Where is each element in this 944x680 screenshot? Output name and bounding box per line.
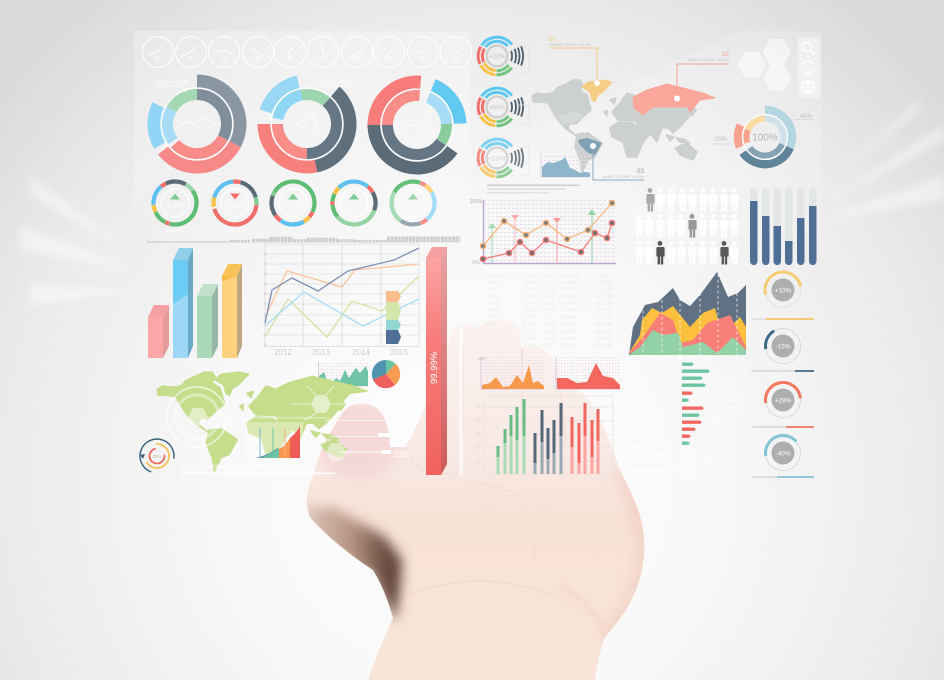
hand [300, 320, 644, 680]
gauge -15% [751, 326, 814, 371]
horizontal bar list: $71.16 [713, 391, 730, 397]
stock ring 2 [209, 177, 261, 233]
faint data table: -0.10 [541, 301, 554, 307]
100% donut chart: 20% [715, 137, 728, 143]
faint data table: +0.53% [559, 322, 578, 328]
volume histogram strip [147, 239, 460, 242]
year labels: 2012 [274, 348, 292, 357]
callout 02 [674, 51, 730, 102]
100% donut chart: 100% [752, 132, 778, 144]
donut 2 callout: S5TO +28.3% [320, 80, 355, 86]
white glass strip [460, 327, 463, 475]
faint data table: +0.37 [541, 280, 555, 286]
orange mini area chart: 100% [477, 357, 486, 361]
small blue area chart [541, 153, 590, 177]
world clocks row: BI [288, 56, 292, 62]
radial gauge +60% [463, 73, 531, 141]
faint data table: 18.50M [594, 322, 613, 328]
horizontal bar list: 130.00 [682, 473, 699, 479]
gauge +28%: +28% [775, 398, 792, 404]
faint data table: 7.45 [523, 294, 534, 300]
faint data table: MXM [487, 329, 500, 335]
stock ring 1 [145, 173, 205, 233]
grouped thin bar chart: 30 [475, 432, 481, 438]
radial gauge +120%: +120% [488, 156, 507, 162]
faint data table: 3.78 [523, 315, 534, 321]
world clocks row: SE [453, 56, 460, 62]
faint data table: -1.29% [559, 329, 577, 335]
faint data table: NBL [487, 322, 498, 328]
yellow bar [222, 264, 242, 358]
faint data table: +0.02 [541, 343, 555, 349]
horizontal bar list: 36.15 - 46.26 B [682, 453, 720, 459]
callout 03: MARKET SHARE +40.5% [602, 175, 645, 179]
faint data table: 25.42M [594, 308, 613, 314]
faint data table: -0.04% [559, 315, 577, 321]
99.99% red 3D bar [426, 247, 447, 475]
world clocks row: SH [420, 56, 427, 62]
marker flags [488, 209, 596, 263]
horizontal bar list: 32,734,197 [713, 413, 741, 419]
world clocks row: CH [187, 56, 195, 62]
year labels [274, 348, 408, 357]
faint data table: STST [487, 315, 502, 321]
faint data table: 224.70 [523, 301, 540, 307]
100% donut chart: 45% [800, 114, 813, 120]
99.99% red 3D bar: 99.99% [429, 351, 440, 384]
faint data table: +0.19% [559, 343, 578, 349]
callout 02: MARKET SHARE +20.0% [687, 58, 730, 62]
donut 1 callout [154, 80, 189, 92]
green world map [157, 372, 367, 472]
faint data table: 18.69M [594, 329, 613, 335]
map land masses [532, 80, 697, 173]
circular arrows gauge: 25% [152, 454, 162, 459]
faint data table: 23.64 [523, 287, 537, 293]
callout 01 [549, 36, 600, 86]
pie chart [372, 360, 400, 388]
faint data table: TEM [487, 308, 499, 314]
gauge -40%: -40% [775, 450, 791, 458]
faint data table: 16.50M [594, 336, 613, 342]
thumb overlay bars [325, 403, 409, 459]
faint data table: 31.21M [594, 287, 613, 293]
horizontal bar list: 0.47 [682, 446, 693, 452]
faint data table: +0.11% [559, 308, 578, 314]
series lines [265, 248, 419, 337]
faint data table: 16.10M [594, 343, 613, 349]
year labels: 2015 [390, 348, 408, 357]
radial gauge +12%: +12% [489, 54, 506, 60]
faint data table: 3.17 [523, 329, 534, 335]
world clocks row: DE [255, 56, 262, 62]
donut 1 callout: S5TO +77.5% [154, 80, 189, 86]
world clocks row: KA [354, 56, 361, 62]
faint data table: DIA [487, 336, 496, 342]
people icon grid [635, 188, 739, 264]
background light rays [20, 100, 944, 305]
faint data table: 22.94 [523, 280, 537, 286]
orange mini area chart [477, 357, 544, 389]
faint data table: 21.00M [594, 315, 613, 321]
donut chart 1 [138, 65, 256, 183]
faint data table: %-Chng [559, 273, 579, 279]
gauge +10% [751, 268, 814, 319]
stock ring 5 [383, 173, 443, 233]
callout 01: 01 [549, 36, 557, 43]
faint data table [487, 273, 613, 349]
faint data table: 0.78 [523, 322, 534, 328]
faint data table: +0.20 [541, 329, 555, 335]
Greenland highlighted [582, 80, 612, 102]
green bar [197, 284, 218, 358]
horizontal bar list: Shares Outstanding [627, 467, 676, 473]
Brazil highlighted [578, 138, 602, 155]
world clocks row: SF [221, 56, 227, 62]
year labels: 2014 [352, 348, 370, 357]
faint data table: +3.06% [559, 301, 578, 307]
horizontal bar list: 35,204,387 [713, 406, 741, 412]
100% donut chart [713, 102, 813, 172]
stock ring 1: STOCK 1 [165, 228, 185, 233]
toolbar icons [798, 37, 820, 98]
light data panel backdrop [134, 31, 470, 250]
world clocks row: LO [320, 56, 326, 62]
world map with callouts [532, 36, 730, 180]
faint data table: +0.67% [559, 287, 578, 293]
dark bars [534, 403, 562, 474]
world clocks row: SY [386, 56, 393, 62]
green bars [496, 399, 526, 474]
faint data table: 12.86 [523, 343, 537, 349]
gray title bars [487, 184, 580, 193]
red mini area chart [556, 357, 620, 389]
faint data table: Last [523, 273, 534, 279]
teal sparkline area chart [318, 362, 368, 386]
stock ring 4 [324, 173, 384, 233]
mountain stacked area chart [629, 272, 746, 355]
horizontal bar list: 38.47 / 96.99 [713, 398, 745, 404]
faint data table: XIV [487, 287, 496, 293]
radial gauge +60%: +60% [489, 104, 506, 112]
faint data table: +1.64% [559, 280, 578, 286]
horizontal bar list: Market Cap [627, 446, 655, 452]
faint data table: Volume [594, 273, 612, 279]
faint data table: +0.04 [541, 308, 555, 314]
stock ring 2: +0.25% [224, 202, 246, 210]
horizontal bar list: N/A [682, 467, 692, 473]
faint data table: CSH [487, 294, 499, 300]
faint data table: SAX [487, 280, 498, 286]
faint data table: SRY [487, 301, 499, 307]
faint data table: USO [487, 343, 500, 349]
world clocks row [142, 36, 472, 68]
grouped thin bar chart [475, 396, 613, 474]
radial gauges trio [463, 22, 531, 192]
stock ring 3 [263, 173, 323, 233]
blue bar [173, 248, 193, 358]
horizontal bar list: 180,868 [713, 420, 733, 426]
callout 03 [590, 143, 645, 180]
faint data table: 45.21M [594, 301, 613, 307]
Russia highlighted [633, 84, 715, 115]
stepped area chart on map [245, 422, 303, 458]
stock ring 3: +0.57% [282, 202, 304, 210]
red bars [570, 403, 600, 474]
grouped thin bar chart: 40 [475, 419, 481, 425]
map overlay targets and hexagons [167, 386, 358, 461]
year labels: 2013 [312, 348, 330, 357]
dual line chart with markers: 100% [470, 199, 483, 205]
world clocks row: NY [155, 56, 162, 62]
multi-line chart 2012-2015 [263, 244, 419, 357]
stock ring 2: STOCK 2 [225, 228, 245, 233]
faint data table: -0.32 [541, 315, 554, 321]
donut chart 2 [246, 63, 368, 185]
faint data table: 26.64 [523, 336, 537, 342]
radial gauge +120% [463, 124, 531, 192]
callout 01: MARKET SHARE +15.5% [549, 43, 591, 47]
stacked legend blocks [386, 291, 401, 344]
vertical blue progress bars [750, 188, 816, 265]
hexagon badges [738, 39, 791, 91]
faint data table: +1.66% [559, 336, 578, 342]
upper right light panel [480, 31, 822, 235]
faint data table: 6.110M [594, 280, 612, 286]
callout 03: 03 [637, 168, 644, 175]
circular arrows gauge [135, 434, 179, 478]
gauge -40% [752, 433, 814, 477]
grouped thin bar chart: 50 [475, 405, 481, 411]
dual line chart with markers: 0% [472, 260, 480, 266]
North America lighter band [557, 112, 585, 125]
faint data table: +0.15 [541, 287, 555, 293]
faint data table: 26.24 [523, 308, 537, 314]
gauge -15%: -15% [775, 344, 791, 350]
donut chart 3 [357, 65, 477, 185]
faint data table: 24.03M [594, 294, 613, 300]
faint data table: Symbol [487, 273, 505, 279]
faint data table: +1.41 [541, 336, 555, 342]
gauge +28% [752, 380, 814, 427]
red bar [148, 305, 169, 358]
horizontal bar list [627, 362, 745, 479]
3D bar chart [148, 248, 242, 358]
orange series [480, 200, 615, 249]
stock ring 1: +0.75% [164, 202, 186, 210]
grouped thin bar chart: 10 [475, 459, 481, 465]
callout 02: 02 [722, 51, 729, 58]
horizontal bar list: Enterprise [627, 473, 652, 479]
white caption bar: ANALYSIS INFORMATION SUMMARY DATA REPORT [180, 464, 303, 470]
thumb overlay bars: 11% [394, 450, 409, 459]
red series [480, 220, 615, 262]
horizontal bar list: 1.29 / 2.76% [682, 460, 713, 466]
faint data table: -1.70% [559, 294, 577, 300]
horizontal bar list: Dividend Yield [627, 460, 662, 466]
faint data table: Chng [541, 273, 554, 279]
faint data table: +0.05 [541, 322, 555, 328]
horizontal bar list: 12,952.06 [713, 383, 737, 389]
grouped thin bar chart: 20 [475, 445, 481, 451]
dual line chart with markers [470, 199, 616, 266]
horizontal bar list: 1,234,400 [713, 376, 737, 382]
gauge +10%: +10% [775, 288, 792, 294]
radial gauge +12% [463, 22, 531, 90]
horizontal bar list: 52 Week Range [627, 453, 666, 459]
faint data table: -0.14 [541, 294, 554, 300]
